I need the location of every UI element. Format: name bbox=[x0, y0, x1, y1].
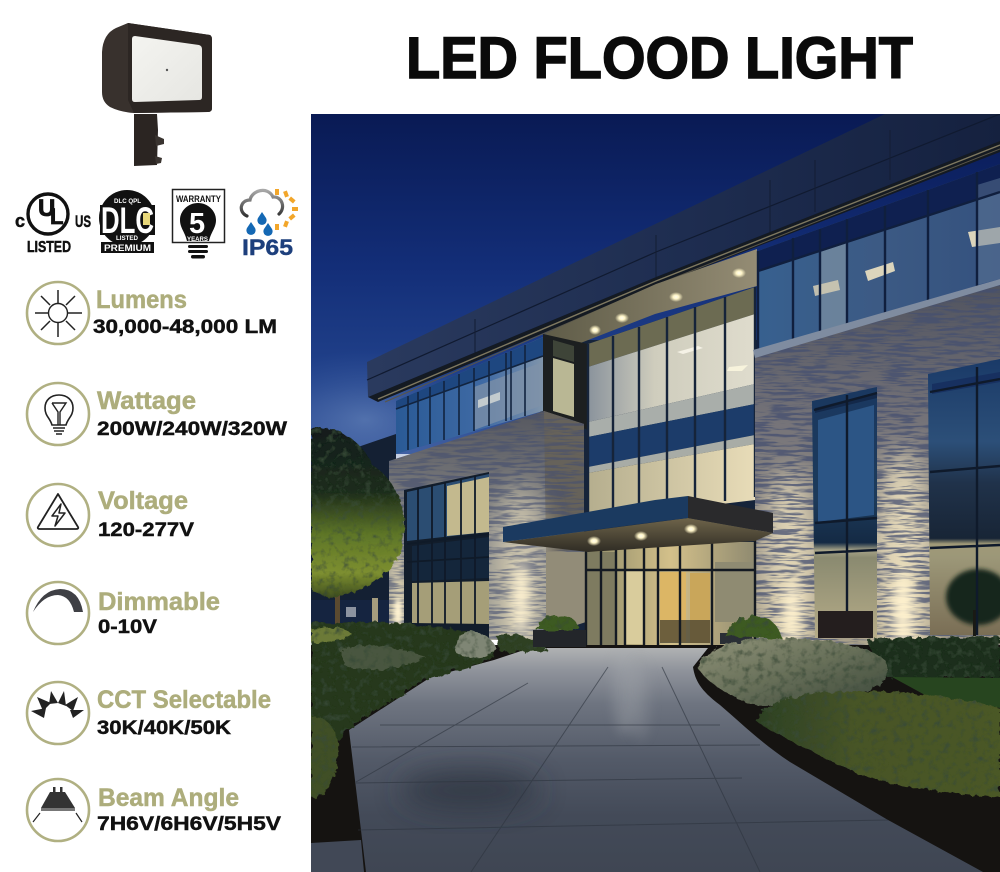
heading: lumens: Lumens bbox=[96, 286, 187, 314]
logo: 5 year warranty: 5 bbox=[189, 208, 205, 240]
upper left windows bbox=[396, 337, 543, 454]
logo: DLC premium bbox=[99, 190, 155, 253]
logo: DLC premium: DLC QPL bbox=[114, 198, 141, 205]
roof fascia bbox=[367, 114, 1000, 397]
logo: DLC premium: DLC bbox=[101, 200, 154, 241]
roof trim line bbox=[368, 141, 1000, 402]
ornamental grasses bbox=[698, 639, 888, 706]
right stone window one bbox=[812, 387, 877, 638]
heading: dimmable: Dimmable bbox=[98, 588, 220, 616]
logo: IP65 weather: IP65 bbox=[242, 235, 293, 260]
front shrubs bbox=[755, 691, 1000, 797]
corner recess bbox=[543, 334, 588, 430]
value: CCT selectable: 30K/40K/50K bbox=[97, 717, 231, 739]
spec: voltage bbox=[27, 484, 194, 546]
lawn bbox=[892, 677, 1000, 708]
right stone window two bbox=[928, 359, 1000, 636]
logo: UL listed: c bbox=[15, 211, 25, 231]
title: LED FLOOD LIGHT bbox=[406, 26, 913, 91]
walkway bbox=[349, 645, 983, 872]
upper right windows bbox=[758, 164, 1000, 349]
right back hedge bbox=[868, 637, 1000, 678]
spec: beam angle bbox=[27, 779, 281, 841]
right stone block bbox=[755, 285, 1000, 670]
canopy soffit bbox=[503, 518, 773, 552]
logo: 5 year warranty bbox=[172, 190, 224, 258]
icon: rising sun bbox=[27, 682, 89, 744]
icon: sun bbox=[27, 282, 89, 344]
left stone block bbox=[389, 411, 589, 655]
logo: UL listed: US bbox=[75, 212, 91, 231]
curb slab bbox=[311, 840, 364, 872]
icon: light bulb bbox=[27, 383, 89, 445]
entrance canopy bbox=[503, 496, 773, 542]
lit soffit bbox=[544, 249, 757, 344]
value: lumens: 30,000-48,000 LM bbox=[93, 316, 277, 338]
spec: lumens bbox=[27, 282, 277, 344]
photo: office building at dusk bbox=[245, 114, 1000, 872]
planters bbox=[533, 615, 782, 647]
tree bbox=[311, 428, 405, 641]
background wing bbox=[311, 434, 396, 640]
left planting beds bbox=[311, 622, 548, 798]
value: voltage: 120-277V bbox=[98, 519, 194, 541]
entrance glazing bbox=[586, 540, 755, 646]
heading: voltage: Voltage bbox=[98, 487, 188, 515]
heading: CCT selectable: CCT Selectable bbox=[97, 686, 271, 714]
logo: 5 year warranty: WARRANTY bbox=[176, 194, 221, 204]
logo: DLC premium: PREMIUM bbox=[104, 243, 151, 253]
left block windows bbox=[404, 472, 489, 640]
spec: CCT selectable bbox=[27, 682, 271, 744]
value: beam angle: 7H6V/6H6V/5H5V bbox=[97, 813, 281, 835]
icon: flood light product bbox=[102, 23, 212, 166]
logo: UL listed: LISTED bbox=[27, 239, 71, 256]
heading: beam angle: Beam Angle bbox=[98, 784, 239, 812]
logo: IP65 weather bbox=[241, 189, 298, 260]
mulch ground bbox=[311, 645, 1000, 872]
heading: wattage: Wattage bbox=[97, 387, 196, 415]
building backing bbox=[540, 340, 760, 650]
spec: dimmable bbox=[27, 582, 220, 644]
icon: lamp beam bbox=[27, 779, 89, 841]
logo: UL listed: U bbox=[38, 195, 55, 222]
logo: UL listed bbox=[15, 194, 91, 256]
spec: wattage bbox=[27, 383, 288, 445]
value: wattage: 200W/240W/320W bbox=[97, 418, 288, 440]
sky bbox=[311, 114, 1000, 459]
icon: high voltage triangle bbox=[27, 484, 89, 546]
value: dimmable: 0-10V bbox=[98, 616, 157, 638]
logo: 5 year warranty: YEARS bbox=[187, 236, 209, 243]
logo: DLC premium: LISTED bbox=[116, 236, 139, 242]
center curtain wall bbox=[588, 287, 755, 520]
icon: dimmer arc bbox=[27, 582, 89, 644]
window sill bbox=[753, 279, 1000, 358]
logo: UL listed: L bbox=[50, 204, 63, 229]
